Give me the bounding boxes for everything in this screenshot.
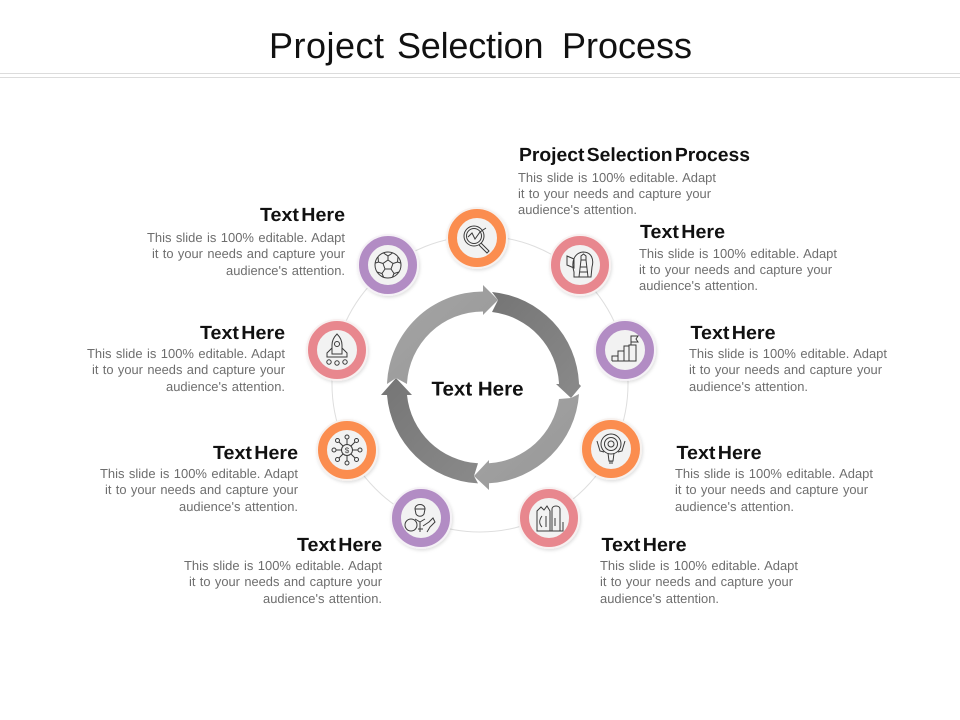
node: rocket (pink) bbox=[306, 319, 368, 381]
text block: left bbox=[87, 323, 286, 394]
text block: upper right bbox=[639, 222, 837, 293]
text block: upper right: This slide is 100% editable. Adapt bbox=[639, 246, 837, 261]
text block: right: it to your needs and capture your bbox=[689, 362, 883, 377]
node: network dollar (orange) bbox=[316, 419, 378, 481]
title: Project bbox=[269, 25, 395, 66]
text block: left: it to your needs and capture your bbox=[92, 362, 286, 377]
node: city hand (pink) bbox=[518, 487, 580, 549]
text block: bottom right: audience's attention. bbox=[600, 591, 719, 606]
text block: lower left: audience's attention. bbox=[179, 499, 298, 514]
node: lighthouse head (pink) bbox=[549, 234, 611, 296]
text block: lower right: Text Here bbox=[676, 443, 762, 464]
text block: upper right: Text Here bbox=[640, 222, 725, 243]
text block: lower right: audience's attention. bbox=[675, 499, 794, 514]
text block: left: This slide is 100% editable. Adapt bbox=[87, 346, 285, 361]
node: bulb signal (orange) bbox=[580, 418, 642, 480]
text block: top: audience's attention. bbox=[518, 202, 637, 217]
text block: lower left: it to your needs and capture your bbox=[105, 482, 299, 497]
text block: top: it to your needs and capture your bbox=[518, 186, 712, 201]
node: search chart (orange, top) bbox=[446, 207, 508, 269]
text block: right: audience's attention. bbox=[689, 379, 808, 394]
center label: Text Here bbox=[432, 378, 524, 400]
text block: left: audience's attention. bbox=[166, 379, 285, 394]
text block: upper left bbox=[147, 205, 346, 278]
text block: bottom left: Text Here bbox=[297, 535, 382, 556]
text block: top bbox=[518, 145, 750, 217]
text block: right bbox=[689, 323, 887, 394]
cycle arrows bbox=[381, 285, 581, 490]
text block: right: Text Here bbox=[690, 323, 776, 344]
text block: upper left: This slide is 100% editable. Adapt bbox=[147, 230, 345, 245]
title: Process bbox=[562, 25, 692, 66]
text block: right: This slide is 100% editable. Adapt bbox=[689, 346, 887, 361]
node: network dollar (orange): $ bbox=[345, 446, 350, 455]
text block: lower right: This slide is 100% editable. Adapt bbox=[675, 466, 873, 481]
text block: bottom right: Text Here bbox=[602, 535, 686, 556]
thin connector ring bbox=[332, 236, 628, 532]
text block: upper left: Text Here bbox=[260, 205, 345, 226]
text block: bottom left: audience's attention. bbox=[263, 591, 382, 606]
text block: upper left: it to your needs and capture your bbox=[152, 246, 346, 261]
title: Selection bbox=[397, 25, 553, 66]
text block: upper left: audience's attention. bbox=[226, 263, 345, 278]
text block: bottom right bbox=[600, 535, 798, 606]
text block: bottom right: it to your needs and capture your bbox=[600, 574, 794, 589]
text block: left: Text Here bbox=[200, 323, 285, 344]
text block: top: Project Selection Process bbox=[519, 145, 750, 166]
text block: bottom left bbox=[184, 535, 383, 606]
text block: lower right: it to your needs and capture your bbox=[675, 482, 869, 497]
text block: bottom left: it to your needs and capture your bbox=[189, 574, 383, 589]
text block: top: This slide is 100% editable. Adapt bbox=[518, 170, 716, 185]
text block: lower right bbox=[675, 443, 873, 514]
text block: lower left: Text Here bbox=[213, 443, 298, 464]
node: stairs and flag (purple) bbox=[594, 319, 656, 381]
text block: lower left bbox=[100, 443, 299, 514]
node: football (purple) bbox=[357, 234, 419, 296]
text block: bottom right: This slide is 100% editable. Adapt bbox=[600, 558, 798, 573]
node: businessman (purple) bbox=[390, 487, 452, 549]
text block: upper right: it to your needs and capture your bbox=[639, 262, 833, 277]
text block: lower left: This slide is 100% editable. Adapt bbox=[100, 466, 298, 481]
text block: upper right: audience's attention. bbox=[639, 278, 758, 293]
text block: bottom left: This slide is 100% editable. Adapt bbox=[184, 558, 382, 573]
